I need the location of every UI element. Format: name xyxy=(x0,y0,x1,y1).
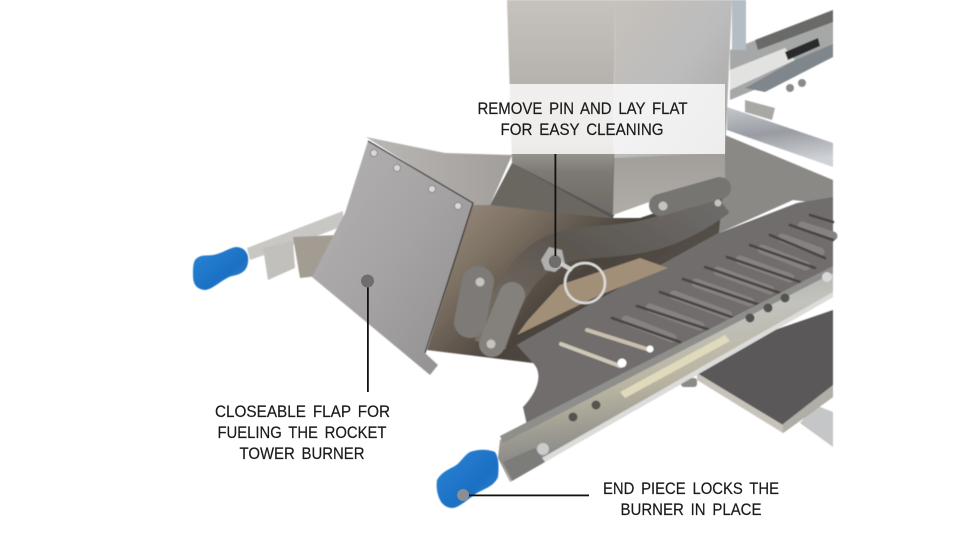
translucent label band xyxy=(509,84,725,154)
tan firebox interior xyxy=(517,258,668,335)
top right drawer rail xyxy=(730,10,833,100)
callout: closeable flap: FUELING THE ROCKET xyxy=(218,423,386,442)
bottom blue end cap xyxy=(437,450,499,508)
callout: closeable flap: CLOSEABLE FLAP FOR xyxy=(215,402,390,421)
locking pin and ring xyxy=(541,247,605,303)
icon: left blue end cap xyxy=(193,247,248,290)
curved side arm xyxy=(490,200,720,345)
fire box floor xyxy=(427,340,533,363)
pivot link xyxy=(470,282,478,322)
hopper body side xyxy=(427,190,723,363)
tower chimney xyxy=(507,0,732,220)
callout: remove pin: REMOVE PIN AND LAY FLAT xyxy=(478,99,688,118)
callout: remove pin xyxy=(478,99,688,268)
callout: closeable flap xyxy=(215,274,390,463)
lower tray xyxy=(681,310,833,447)
callout: end piece: BURNER IN PLACE xyxy=(620,500,762,519)
rear support post xyxy=(732,0,746,50)
callout: end piece xyxy=(457,479,779,519)
left handle and bracket xyxy=(247,211,343,280)
product photo xyxy=(193,0,833,508)
front drawer rail xyxy=(498,266,833,482)
callout: closeable flap: TOWER BURNER xyxy=(240,444,364,463)
rear frame beams xyxy=(719,100,833,233)
perforated grate plate xyxy=(517,197,833,425)
closeable flap xyxy=(312,141,473,375)
callout: end piece: END PIECE LOCKS THE xyxy=(603,479,779,498)
callout: remove pin: FOR EASY CLEANING xyxy=(500,120,664,139)
hopper top face xyxy=(366,137,512,205)
